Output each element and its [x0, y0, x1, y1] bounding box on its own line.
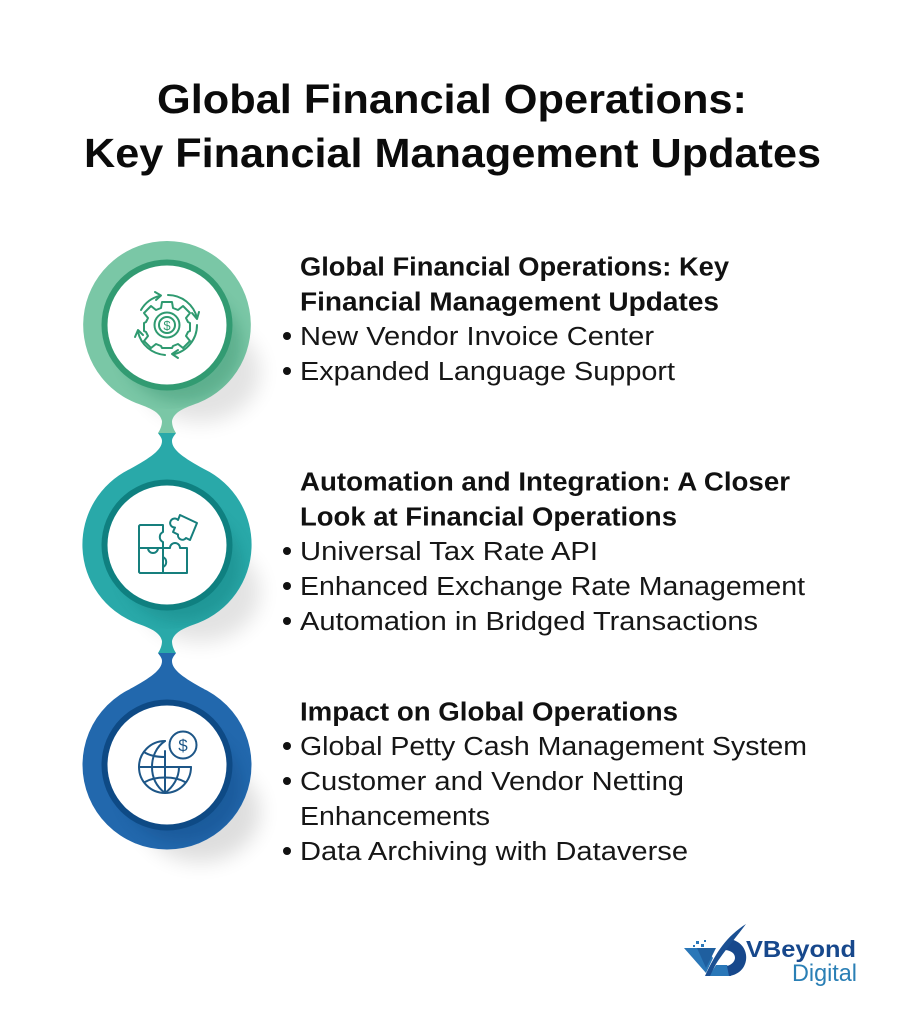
section 3: impact on global operations: Data Archiving with Dataverse — [300, 838, 688, 866]
section 1: general updates: New Vendor Invoice Center — [300, 323, 655, 351]
section 3: impact on global operations: Impact on Global Operations — [300, 698, 678, 726]
soft shadows — [140, 322, 260, 862]
section 2: automation and integration: Automation and Integration: A Closer — [300, 468, 790, 496]
section 1: general updates: Financial Management Updates — [300, 288, 719, 316]
section 1: general updates: Expanded Language Support — [300, 358, 675, 386]
icon: puzzle pieces — [139, 515, 197, 573]
timeline graphic — [82, 241, 260, 862]
title — [84, 76, 821, 176]
section 3: impact on global operations: Enhancements — [300, 803, 490, 831]
section 1: general updates — [283, 254, 730, 386]
section 3: impact on global operations — [283, 698, 807, 866]
section 1: general updates: Global Financial Operations: Key — [300, 254, 730, 282]
section 2: automation and integration: Automation in Bridged Transactions — [300, 608, 758, 636]
logo: VBeyond Digital: VBeyond — [746, 936, 856, 962]
icon: globe with dollar coin — [139, 732, 196, 793]
title: Global Financial Operations: — [157, 76, 747, 122]
section 2: automation and integration: Enhanced Exchange Rate Management — [300, 573, 805, 601]
node 3: blue disc — [82, 653, 252, 850]
section 2: automation and integration: Look at Financial Operations — [300, 504, 677, 532]
section 3: impact on global operations: Global Petty Cash Management System — [300, 733, 807, 761]
node 2: teal disc — [82, 433, 252, 653]
icon: gear with dollar and cycle arrows: $ — [163, 318, 171, 333]
icon: gear with dollar and cycle arrows — [135, 292, 199, 358]
section 2: automation and integration — [283, 468, 805, 636]
logo: VBeyond Digital: Digital — [792, 960, 857, 987]
section 3: impact on global operations: Customer and Vendor Netting — [300, 768, 684, 796]
title: Key Financial Management Updates — [84, 130, 821, 176]
section 2: automation and integration: Universal Tax Rate API — [300, 538, 598, 566]
logo: VBeyond Digital — [684, 924, 857, 987]
icon: globe with dollar coin: $ — [178, 736, 188, 755]
node 1: green disc — [83, 241, 251, 433]
